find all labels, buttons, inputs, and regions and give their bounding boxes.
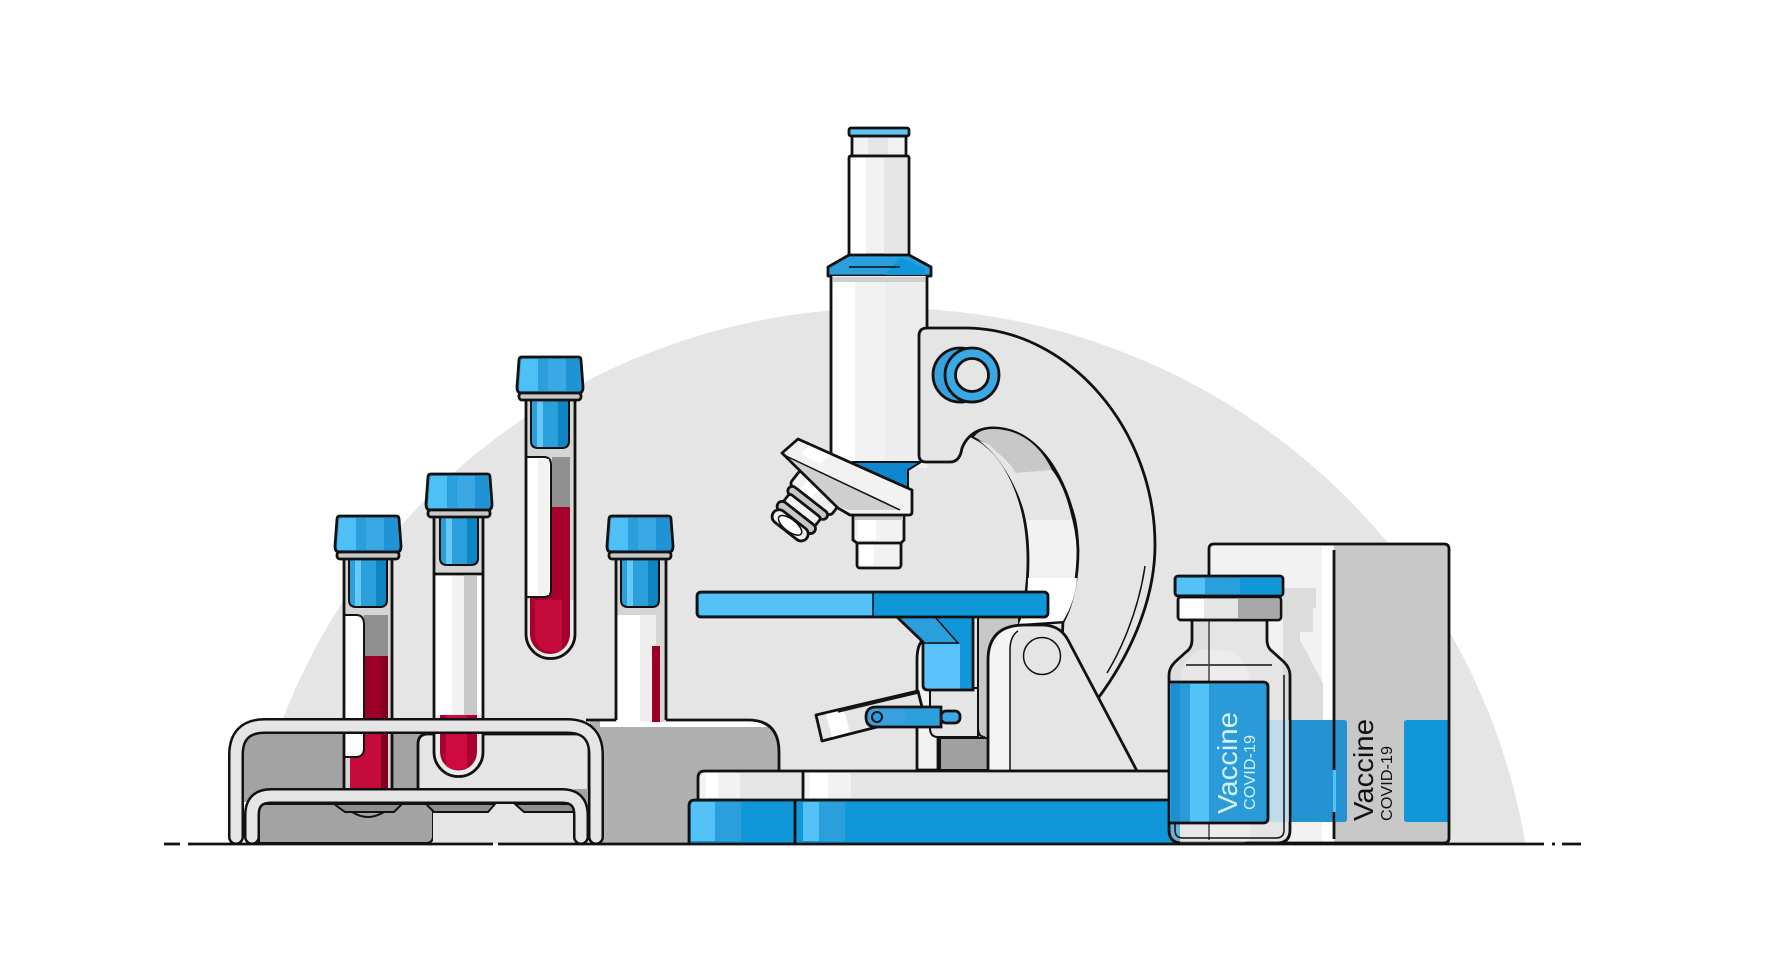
tube 4 stopper (621, 559, 659, 607)
stand column and rear blocks (917, 617, 1018, 770)
base bottom plate (689, 800, 1180, 843)
base top plate (698, 771, 1175, 799)
test tube 4 (607, 516, 673, 722)
vial shadow on box (1283, 588, 1323, 725)
arm (919, 328, 1155, 700)
rack interior panels (243, 732, 590, 844)
vial glass (1169, 620, 1290, 843)
rack back block (586, 720, 779, 844)
vial text COVID-19: COVID-19 (1242, 735, 1259, 810)
tube 1 cap (335, 516, 401, 559)
mirror (816, 691, 924, 741)
objective turret (782, 439, 912, 515)
test tube 2 (426, 474, 492, 776)
box blue stripes (1268, 720, 1347, 822)
test tube 1 (335, 516, 401, 800)
microscope (689, 128, 1180, 843)
blue collar (828, 255, 931, 276)
box text COVID-19: COVID-19 (1379, 746, 1396, 821)
eyepiece (849, 128, 909, 255)
box right face (1334, 544, 1449, 843)
background dome (249, 308, 1525, 844)
box divider (1333, 550, 1335, 839)
vaccine vial (1169, 576, 1290, 843)
vaccine box (1209, 544, 1449, 843)
tube 2 stopper (440, 517, 478, 565)
stage adjustment knob (866, 707, 960, 727)
tube 3 stopper (531, 400, 569, 448)
rack front frame (236, 726, 596, 837)
ground line (164, 843, 1581, 845)
left objective (764, 460, 850, 548)
box left face (1209, 544, 1334, 843)
tube 3 cap (517, 357, 583, 400)
right objective (853, 514, 904, 568)
stage (697, 592, 1048, 617)
tube 1 stopper (349, 559, 387, 607)
test tube 3 (tall) (517, 357, 583, 658)
vial text Vaccine: Vaccine (1212, 712, 1243, 814)
arm inner band (973, 428, 1078, 625)
vial label (1170, 682, 1268, 823)
nosepiece blue (853, 462, 921, 490)
tube 2 cap (426, 474, 492, 517)
box text Vaccine: Vaccine (1348, 719, 1379, 821)
box outline (1209, 544, 1449, 843)
rack inner frame (252, 796, 581, 837)
tube 4 cap (607, 516, 673, 559)
stand foot (988, 625, 1137, 771)
vial collar (1178, 597, 1281, 620)
vial cap (1175, 576, 1283, 596)
focus knob (933, 348, 999, 404)
stage support (897, 617, 973, 690)
main tube (831, 276, 927, 468)
